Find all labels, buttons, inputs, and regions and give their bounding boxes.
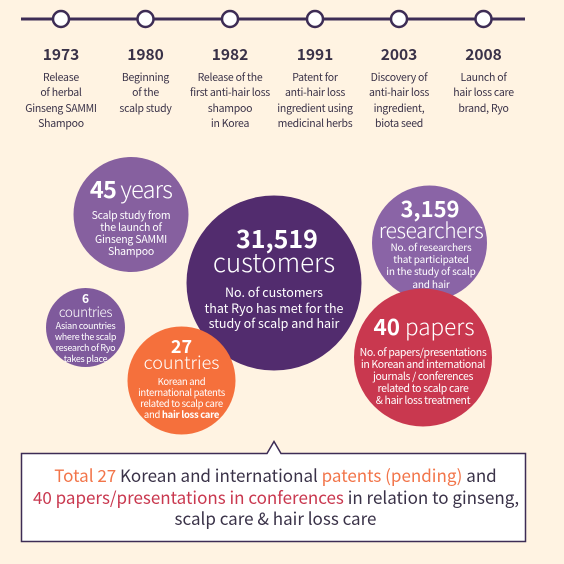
milestone 1973: Shampoo	[38, 116, 84, 131]
bubble: 3,159 researchers: that participated	[393, 251, 469, 266]
bubble: 27 countries: 27	[171, 333, 192, 359]
bubble: 27 countries: countries	[144, 349, 219, 375]
milestone 1980	[119, 43, 172, 116]
bubble: 6 countries: research of Ryo	[56, 341, 115, 354]
bubble: 6 countries: 6	[82, 290, 89, 307]
milestone 1982: 1982	[212, 43, 248, 65]
bubble: 45 years: the launch of	[100, 220, 162, 235]
milestone 1991: 1991	[297, 43, 333, 65]
timeline axis	[21, 11, 525, 27]
bubble: 45 years: Shampoo	[108, 244, 154, 259]
milestone 2003	[369, 43, 429, 131]
bubble: 40 papers: related to scalp care	[378, 381, 469, 396]
bubble: 27 countries: and hair loss care	[144, 407, 220, 421]
bubble: 40 papers: & hair loss treatment	[376, 393, 471, 408]
bubble: 40 papers: journals / conferences	[372, 369, 473, 384]
milestone 1973: 1973	[43, 43, 79, 65]
milestone 1982: Release of the	[198, 70, 263, 85]
milestone 1982: shampoo	[208, 101, 252, 116]
bubble: 45 years: Scalp study from	[92, 208, 170, 223]
milestone 1973: Release	[43, 70, 79, 85]
milestone 1982	[190, 43, 270, 131]
bubble: 27 countries: international patents	[138, 385, 226, 399]
milestone 2008: 2008	[465, 43, 502, 65]
milestone 2008: brand, Ryo	[458, 101, 509, 116]
milestone 1991: ingredient using	[277, 101, 353, 116]
milestone 2008: hair loss care	[453, 85, 514, 100]
bubble: 3,159 researchers: in the study of scalp	[386, 263, 476, 278]
milestone 1980: 1980	[127, 43, 164, 65]
bubble: 31,519 customers: that Ryo has met for the	[205, 298, 344, 317]
callout box	[22, 442, 526, 542]
milestone 2003: biota seed	[375, 116, 423, 131]
milestone 1973: of herbal	[40, 85, 82, 100]
milestone 2003: ingredient,	[374, 101, 425, 116]
milestone 1982: first anti-hair loss	[190, 85, 270, 100]
bubble: 3,159 researchers: and hair	[412, 276, 450, 291]
milestone 2008	[453, 43, 514, 116]
bubble: 31,519 customers: 31,519	[236, 220, 318, 256]
milestone 1980: scalp study	[119, 101, 172, 116]
bubble: 31,519 customers	[186, 196, 362, 370]
bubble: 6 countries	[46, 288, 125, 367]
milestone 1991: Patent for	[292, 70, 339, 85]
milestone 1980: of the	[132, 85, 159, 100]
bubble: 3,159 researchers: 3,159	[400, 192, 460, 224]
bubble: 6 countries: countries	[59, 301, 112, 321]
bubble: 31,519 customers: No. of customers	[225, 282, 323, 301]
milestone 2003: anti-hair loss	[369, 85, 429, 100]
bubble: 31,519 customers: study of scalp and hair	[209, 313, 340, 332]
bubble: 6 countries: takes place	[64, 352, 108, 365]
callout text: 40 papers/presentations in conferences in relation to ginseng,	[33, 484, 519, 509]
callout text	[33, 462, 519, 530]
milestone 1973	[25, 43, 97, 131]
bubble: 40 papers: No. of papers/presentations	[360, 345, 487, 360]
bubble: 3,159 researchers: researchers	[379, 215, 483, 245]
callout text: Total 27 Korean and international patents (pending) and	[54, 462, 497, 487]
bubble: 40 papers: 40 papers	[373, 310, 475, 342]
bubble: 6 countries: Asian countries	[56, 319, 115, 332]
milestone 1991: anti-hair loss	[285, 85, 345, 100]
milestone 1973: Ginseng SAMMI	[25, 101, 97, 116]
bubble: 45 years: 45 years	[90, 171, 172, 205]
bubble: 27 countries	[128, 326, 236, 434]
callout text: scalp care & hair loss care	[175, 505, 376, 530]
milestone 1980: Beginning	[122, 70, 169, 85]
bubble: 27 countries: Korean and	[158, 374, 206, 388]
bubble: 27 countries: related to scalp care	[140, 396, 223, 410]
milestone 1982: in Korea	[211, 116, 249, 131]
bubble: 6 countries: where the scalp	[55, 330, 117, 343]
milestone 2008: Launch of	[460, 70, 507, 85]
milestone 1991	[277, 43, 353, 131]
bubble: 40 papers: in Korean and international	[361, 357, 486, 372]
milestone 2003: Discovery of	[371, 70, 428, 85]
bubble: 3,159 researchers	[372, 186, 487, 300]
bubble: 3,159 researchers: No. of researchers	[390, 239, 472, 254]
bubble: 45 years	[74, 157, 188, 272]
bubble: 40 papers	[354, 288, 492, 426]
milestone 2003: 2003	[381, 43, 417, 65]
bubble: 31,519 customers: customers	[213, 243, 335, 280]
milestone 1991: medicinal herbs	[278, 116, 353, 131]
bubble: 45 years: Ginseng SAMMI	[95, 232, 167, 247]
